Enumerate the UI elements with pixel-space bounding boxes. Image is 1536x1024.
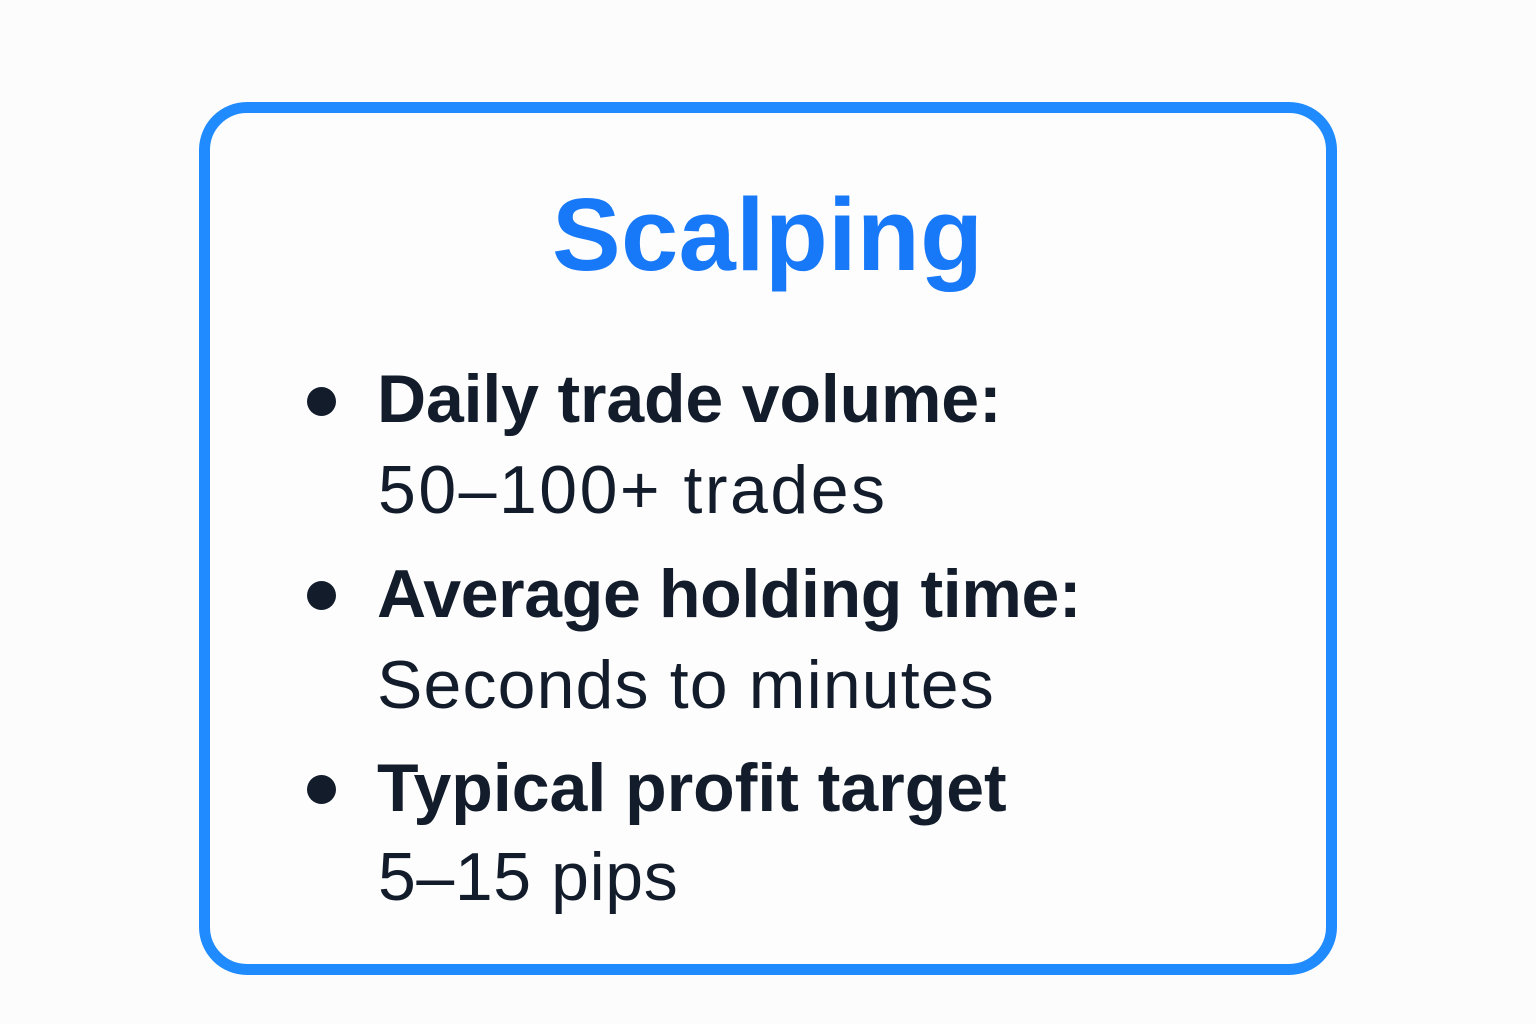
- bullet icon 1: [307, 387, 336, 416]
- bullet icon 3: [307, 775, 336, 804]
- text: daily trade volume value: 50–100+ trades: [378, 452, 888, 528]
- text: average holding time label: Average holding time:: [377, 556, 1081, 632]
- text: typical profit target label: Typical profit target: [377, 750, 1007, 826]
- text: average holding time value: Seconds to minutes: [377, 647, 995, 723]
- title: Scalping: [552, 177, 983, 292]
- bullet icon 2: [307, 581, 336, 610]
- panel: scalping card: [199, 102, 1337, 975]
- text: typical profit target value: 5–15 pips: [378, 839, 678, 915]
- text: daily trade volume label: Daily trade volume:: [377, 361, 1001, 437]
